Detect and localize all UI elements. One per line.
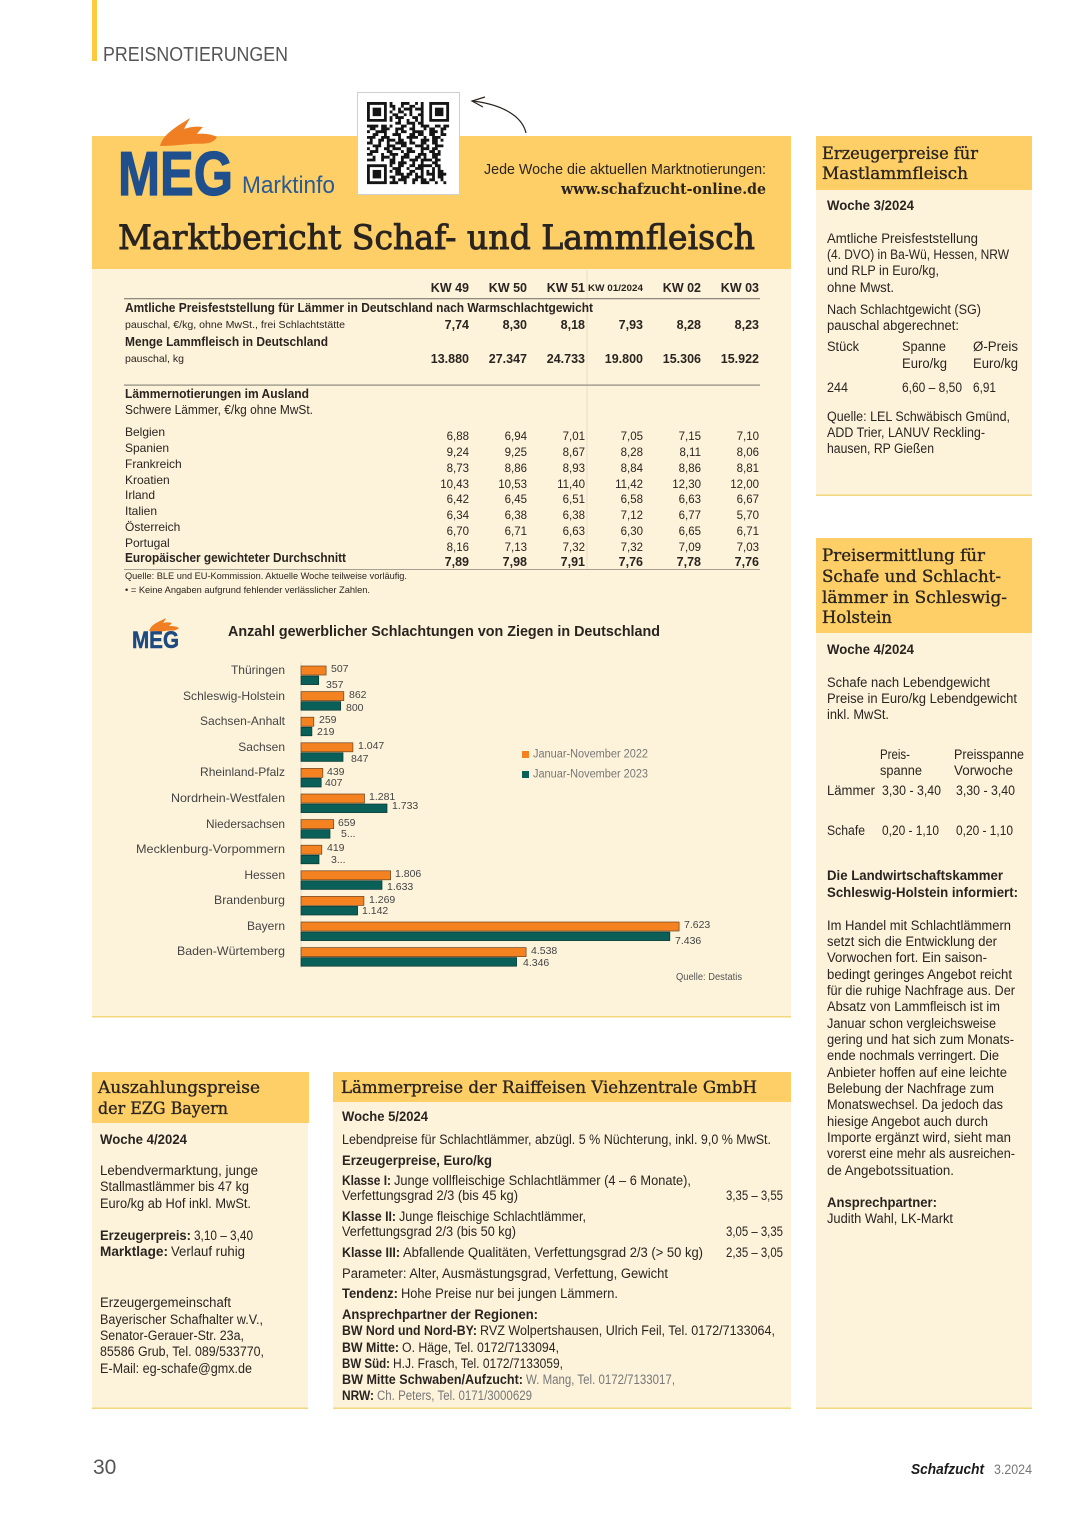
address: Bayerischer Schafhalter w.V., — [100, 1312, 263, 1327]
market commentary: Importe ergänzt wird, sieht man — [827, 1130, 1011, 1145]
row: price determination: Amtliche Preisfeststellung für Lämmer in Deutschland nach Warmschlachtgewicht — [125, 301, 594, 315]
title: Marktbericht Schaf- und Lammfleisch — [118, 218, 755, 258]
row: price determination: pauschal, €/kg, ohne MwSt., frei Schlachtstätte — [125, 319, 345, 331]
icon: small MEG logo: MEG — [132, 627, 179, 654]
price table: 6,91 — [973, 380, 996, 395]
row: price determination: 7,74 — [445, 318, 469, 332]
price classes: Klasse I: — [342, 1173, 391, 1188]
bar value labels: 1.281 — [369, 791, 395, 803]
country rows: 7,09 — [679, 542, 701, 554]
state labels: Nordrhein-Westfalen — [171, 791, 285, 805]
price table: 0,20 - 1,10 — [956, 823, 1013, 838]
state labels: Brandenburg — [214, 893, 285, 907]
country rows — [125, 425, 759, 569]
price table: 3,30 - 3,40 — [956, 783, 1015, 798]
regional contacts: Ch. Peters, Tel. 0171/3000629 — [377, 1388, 532, 1403]
country rows: 7,76 — [619, 555, 643, 569]
bar value labels: 1.633 — [387, 881, 413, 893]
price table: Lämmer — [827, 783, 875, 798]
masthead — [911, 1461, 1032, 1478]
country rows: Spanien — [125, 441, 169, 455]
note: weekly notations: Jede Woche die aktuellen Marktnotierungen: — [484, 162, 766, 178]
masthead: 3.2024 — [994, 1462, 1032, 1477]
chart legend: Januar-November 2022 — [533, 748, 648, 760]
panel text — [100, 1132, 258, 1259]
row: lamb meat quantity: 24.733 — [547, 352, 585, 366]
price classes: 2,35 – 3,05 — [726, 1245, 783, 1260]
price classes: Erzeugerpreise, Euro/kg — [342, 1153, 492, 1168]
intro text: Schafe nach Lebendgewicht — [827, 675, 990, 690]
country rows: 6,94 — [505, 431, 528, 443]
country rows: 7,32 — [621, 542, 643, 554]
country rows: Österreich — [125, 520, 180, 534]
bar value labels: 1.269 — [369, 894, 395, 906]
price table: Vorwoche — [954, 763, 1013, 778]
section heading: PREISNOTIERUNGEN — [103, 44, 288, 66]
regional contacts: BW Mitte Schwaben/Aufzucht: — [342, 1372, 523, 1387]
orange bars 2022 — [301, 666, 679, 957]
panel: Preisermittlung Schleswig-Holstein — [816, 538, 1032, 1409]
icon: small MEG logo — [132, 618, 179, 654]
country rows: Kroatien — [125, 473, 170, 487]
bar value labels: 1.142 — [362, 905, 388, 917]
panel text: Erzeugerpreis: — [100, 1228, 191, 1243]
panel text: Verlauf ruhig — [171, 1244, 245, 1259]
market commentary: hiesige Angebot auch durch — [827, 1114, 988, 1129]
state labels: Sachsen — [238, 740, 285, 754]
country rows: Portugal — [125, 536, 170, 550]
price table: spanne — [880, 763, 922, 778]
country rows: 6,63 — [679, 494, 701, 506]
table: lamb prices — [124, 270, 760, 596]
regional contacts: BW Süd: — [342, 1356, 390, 1371]
row: price determination — [125, 301, 759, 332]
market commentary: Anbieter hoffen auf eine leichte — [827, 1065, 1007, 1080]
country rows: 9,25 — [505, 447, 527, 459]
bar value labels: 1.806 — [395, 868, 421, 880]
bar value labels: 259 — [319, 714, 337, 726]
chart legend — [522, 748, 648, 780]
panel heading: Auszahlungspreise — [97, 1078, 260, 1098]
country rows: 7,15 — [679, 431, 701, 443]
market commentary: Im Handel mit Schlachtlämmern — [827, 918, 1011, 933]
panel heading: der EZG Bayern — [98, 1099, 228, 1119]
source: hausen, RP Gießen — [827, 441, 934, 456]
address: Erzeugergemeinschaft — [100, 1295, 231, 1310]
row: price determination: 7,93 — [619, 318, 643, 332]
country rows: Belgien — [125, 425, 165, 439]
address — [100, 1295, 264, 1376]
row: price determination: 8,30 — [503, 318, 527, 332]
country rows: 8,73 — [447, 463, 469, 475]
price classes: Tendenz: — [342, 1286, 398, 1301]
panel: Auszahlungspreise EZG Bayern — [92, 1072, 309, 1409]
state labels: Baden-Würtemberg — [177, 944, 285, 958]
page number: 30 — [93, 1456, 116, 1479]
price classes: 3,05 – 3,35 — [726, 1224, 783, 1239]
table header: KW 50 — [489, 281, 527, 295]
bar value labels: 4.538 — [531, 945, 557, 957]
bar value labels: 3... — [331, 854, 346, 866]
row: lamb meat quantity: pauschal, kg — [125, 353, 184, 365]
country rows: 6,58 — [621, 494, 643, 506]
panel heading — [816, 136, 1032, 190]
source — [827, 409, 1010, 456]
country rows: 6,34 — [447, 510, 470, 522]
country rows: 8,84 — [621, 463, 644, 475]
country rows: 6,30 — [621, 526, 643, 538]
country rows: Irland — [125, 488, 155, 502]
arrow to QR code — [472, 97, 526, 133]
country rows: 7,03 — [737, 542, 759, 554]
bar value labels: 219 — [317, 726, 335, 738]
chart title: Anzahl gewerblicher Schlachtungen von Ziegen in Deutschland — [228, 623, 660, 640]
country rows: 6,88 — [447, 431, 469, 443]
country rows: 8,06 — [737, 447, 759, 459]
address: Senator-Gerauer-Str. 23a, — [100, 1328, 244, 1343]
market commentary: setzt sich die Entwicklung der — [827, 934, 997, 949]
table header: KW 03 — [721, 281, 759, 295]
country rows: 11,40 — [557, 479, 585, 491]
bar value labels: 357 — [326, 679, 344, 691]
country rows: 7,12 — [621, 510, 643, 522]
country rows: 6,71 — [737, 526, 759, 538]
foreign notations heading — [125, 387, 313, 417]
price table: 0,20 - 1,10 — [882, 823, 939, 838]
table header: KW 49 — [431, 281, 469, 295]
country rows: 10,43 — [440, 479, 469, 491]
panel text: Lebendvermarktung, junge — [100, 1163, 258, 1178]
country rows: 6,67 — [737, 494, 759, 506]
price classes — [342, 1109, 783, 1301]
price table: Euro/kg — [973, 356, 1018, 371]
masthead: Schafzucht — [911, 1461, 985, 1478]
price table — [827, 747, 1024, 838]
country rows: 6,77 — [679, 510, 701, 522]
country rows: 7,76 — [735, 555, 759, 569]
country rows: 6,38 — [563, 510, 585, 522]
contact: Judith Wahl, LK-Markt — [827, 1211, 953, 1226]
country rows: 12,30 — [672, 479, 701, 491]
market commentary: Monatswechsel. Da jedoch das — [827, 1097, 1003, 1112]
bar chart: goat slaughter by state — [136, 662, 710, 969]
country rows: 7,89 — [445, 555, 469, 569]
table header — [124, 281, 760, 299]
row: lamb meat quantity: 15.306 — [663, 352, 701, 366]
market commentary: Schleswig-Holstein informiert: — [827, 885, 1018, 900]
panel text: 3,10 – 3,40 — [194, 1228, 253, 1243]
panel heading: Preisermittlung für — [822, 546, 986, 566]
regional contacts: RVZ Wolpertshausen, Ulrich Feil, Tel. 0172/7133064, — [480, 1323, 775, 1338]
bar value labels: 407 — [325, 777, 343, 789]
market commentary: Die Landwirtschaftskammer — [827, 868, 1004, 883]
country rows: 10,53 — [498, 479, 527, 491]
price classes: Abfallende Qualitäten, Verfettungsgrad 2/3 (> 50 kg) — [403, 1245, 703, 1260]
market commentary: Belebung der Nachfrage zum — [827, 1081, 994, 1096]
panel heading: lämmer in Schleswig- — [822, 588, 1007, 608]
row: price determination: 8,18 — [561, 318, 585, 332]
country rows: 6,65 — [679, 526, 701, 538]
regional contacts: NRW: — [342, 1388, 374, 1403]
country rows: 8,67 — [563, 447, 585, 459]
icon: MEG Marktinfo logo: MEG — [118, 140, 233, 209]
country rows: Europäischer gewichteter Durchschnitt — [125, 551, 347, 565]
row: price determination: 8,28 — [677, 318, 701, 332]
row: lamb meat quantity — [125, 335, 759, 366]
price classes: Parameter: Alter, Ausmästungsgrad, Verfettung, Gewicht — [342, 1266, 668, 1281]
market commentary: Januar schon vergleichsweise — [827, 1016, 996, 1031]
panel text: (4. DVO) in Ba-Wü, Hessen, NRW — [827, 247, 1009, 262]
country rows: 12,00 — [730, 479, 759, 491]
price classes: Woche 5/2024 — [342, 1109, 428, 1124]
country rows: 6,51 — [563, 494, 585, 506]
price table: Preis- — [880, 747, 910, 762]
country rows: 8,11 — [679, 447, 701, 459]
price classes: Lebendpreise für Schlachtlämmer, abzügl. 5 % Nüchterung, inkl. 9,0 % MwSt. — [342, 1132, 771, 1147]
market commentary: vorerst eine mehr als ausreichen- — [827, 1146, 1015, 1161]
bar value labels: 507 — [331, 663, 349, 675]
panel heading — [92, 1072, 309, 1123]
table header: KW 02 — [663, 281, 701, 295]
state labels: Hessen — [244, 868, 285, 882]
market commentary: für die ruhige Nachfrage aus. Der — [827, 983, 1015, 998]
contact — [827, 1195, 953, 1226]
panel heading: Holstein — [822, 608, 892, 628]
panel heading: Schafe und Schlacht- — [822, 567, 1001, 587]
intro text: inkl. MwSt. — [827, 707, 889, 722]
market commentary: Absatz von Lammfleisch ist im — [827, 999, 1000, 1014]
panel text: und RLP in Euro/kg, — [827, 263, 939, 278]
country rows: 5,70 — [737, 510, 759, 522]
country rows: 8,86 — [679, 463, 701, 475]
bar value labels — [317, 663, 710, 969]
state labels: Schleswig-Holstein — [183, 689, 285, 703]
bar value labels: 800 — [346, 702, 364, 714]
note: weekly notations: www.schafzucht-online.de — [560, 181, 766, 198]
country rows: 7,91 — [561, 555, 585, 569]
panel text: Nach Schlachtgewicht (SG) — [827, 302, 981, 317]
country rows: 6,63 — [563, 526, 585, 538]
panel heading: Mastlammfleisch — [822, 164, 968, 184]
bar value labels: 7.623 — [684, 919, 710, 931]
country rows: 8,86 — [505, 463, 527, 475]
panel heading — [333, 1072, 791, 1102]
regional contacts: H.J. Frasch, Tel. 0172/7133059, — [393, 1356, 563, 1371]
source: ADD Trier, LANUV Reckling- — [827, 425, 985, 440]
regional contacts: O. Häge, Tel. 0172/7133094, — [402, 1340, 559, 1355]
row: lamb meat quantity: 13.880 — [431, 352, 469, 366]
price table: Stück — [827, 339, 859, 354]
price classes: Junge fleischige Schlachtlämmer, — [399, 1209, 586, 1224]
market commentary — [827, 868, 1018, 1178]
row: lamb meat quantity: 27.347 — [489, 352, 527, 366]
price table: Ø-Preis — [973, 339, 1018, 354]
country rows: 9,24 — [447, 447, 470, 459]
state labels: Niedersachsen — [206, 817, 285, 831]
panel text: Euro/kg ab Hof inkl. MwSt. — [100, 1196, 251, 1211]
state labels: Sachsen-Anhalt — [200, 714, 286, 728]
country rows: Italien — [125, 504, 157, 518]
country rows: 6,42 — [447, 494, 469, 506]
country rows: 7,13 — [505, 542, 527, 554]
panel heading: Erzeugerpreise für — [822, 144, 979, 164]
country rows: 7,05 — [621, 431, 643, 443]
country rows: 8,16 — [447, 542, 469, 554]
bar value labels: 5... — [341, 828, 356, 840]
price classes: Verfettungsgrad 2/3 (bis 50 kg) — [342, 1224, 516, 1239]
panel heading: Lämmerpreise der Raiffeisen Viehzentrale GmbH — [341, 1078, 757, 1098]
section heading — [92, 0, 288, 66]
table header: KW 51 — [547, 281, 585, 295]
market commentary: gering und hat sich zum Monats- — [827, 1032, 1014, 1047]
header band — [92, 118, 791, 269]
regional contacts: W. Mang, Tel. 0172/7133017, — [526, 1372, 675, 1387]
panel text: Amtliche Preisfeststellung — [827, 231, 978, 246]
table header: KW 01/2024 — [588, 283, 643, 293]
chart source: Quelle: Destatis — [676, 972, 742, 983]
table source note: Quelle: BLE und EU-Kommission. Aktuelle Woche teilweise vorläufig. — [125, 571, 407, 582]
country rows: 6,70 — [447, 526, 469, 538]
panel text — [827, 198, 1009, 333]
bar value labels: 1.047 — [358, 740, 384, 752]
bar value labels: 4.346 — [523, 957, 549, 969]
price classes: Klasse II: — [342, 1209, 396, 1224]
table source note — [125, 571, 407, 596]
country rows: 7,78 — [677, 555, 701, 569]
row: lamb meat quantity: Menge Lammfleisch in Deutschland — [125, 335, 328, 349]
price classes: Junge vollfleischige Schlachtlämmer (4 – 6 Monate), — [394, 1173, 691, 1188]
country rows: 7,10 — [737, 431, 759, 443]
country rows: 8,93 — [563, 463, 585, 475]
address: 85586 Grub, Tel. 089/533770, — [100, 1344, 264, 1359]
regional contacts: BW Nord und Nord-BY: — [342, 1323, 477, 1338]
panel: Erzeugerpreise für Mastlammfleisch — [816, 136, 1032, 496]
market commentary: de Angebotssituation. — [827, 1163, 954, 1178]
panel text: Woche 3/2024 — [827, 198, 914, 213]
country rows: 6,45 — [505, 494, 527, 506]
market commentary: Vorwochen fort. Ein saison- — [827, 950, 987, 965]
panel text: pauschal abgerechnet: — [827, 318, 959, 333]
price classes: Hohe Preise nur bei jungen Lämmern. — [401, 1286, 618, 1301]
source: Quelle: LEL Schwäbisch Gmünd, — [827, 409, 1010, 424]
country rows: 8,81 — [737, 463, 759, 475]
bar value labels: 7.436 — [675, 935, 701, 947]
row: price determination: 8,23 — [735, 318, 759, 332]
price table: 244 — [827, 380, 848, 395]
country rows: 7,01 — [563, 431, 585, 443]
green bars 2023 — [301, 676, 670, 966]
row: lamb meat quantity: 15.922 — [721, 352, 759, 366]
state labels: Mecklenburg-Vorpommern — [136, 842, 285, 856]
price table: Preisspanne — [954, 747, 1024, 762]
price table: 3,30 - 3,40 — [882, 783, 941, 798]
country rows: 11,42 — [615, 479, 643, 491]
price table: Euro/kg — [902, 356, 947, 371]
panel: Lämmerpreise Raiffeisen — [333, 1072, 791, 1409]
icon: MEG Marktinfo logo — [118, 118, 335, 209]
regional contacts: Ansprechpartner der Regionen: — [342, 1307, 538, 1322]
bar value labels: 659 — [338, 817, 356, 829]
country rows: 7,98 — [503, 555, 527, 569]
bar value labels: 862 — [349, 689, 367, 701]
icon: QR code — [358, 92, 460, 194]
country rows: 7,32 — [563, 542, 585, 554]
state labels: Bayern — [247, 919, 285, 933]
note: weekly notations — [484, 162, 766, 198]
price table: Schafe — [827, 823, 865, 838]
state labels: Rheinland-Pfalz — [200, 765, 285, 779]
price classes: Verfettungsgrad 2/3 (bis 45 kg) — [342, 1188, 518, 1203]
row: lamb meat quantity: 19.800 — [605, 352, 643, 366]
address: E-Mail: eg-schafe@gmx.de — [100, 1361, 252, 1376]
intro text: Woche 4/2024 — [827, 642, 914, 657]
country rows: 6,71 — [505, 526, 527, 538]
market commentary: bedingt geringes Angebot reicht — [827, 967, 1012, 982]
country rows: 8,28 — [621, 447, 643, 459]
bar value labels: 419 — [327, 842, 345, 854]
foreign notations heading: Schwere Lämmer, €/kg ohne MwSt. — [125, 403, 313, 417]
country rows: 6,38 — [505, 510, 527, 522]
icon: MEG Marktinfo logo: Marktinfo — [242, 172, 335, 199]
intro text — [827, 642, 1017, 722]
price classes: 3,35 – 3,55 — [726, 1188, 783, 1203]
price table: Spanne — [902, 339, 946, 354]
chart legend: Januar-November 2023 — [533, 768, 648, 780]
intro text: Preise in Euro/kg Lebendgewicht — [827, 691, 1017, 706]
price classes: Klasse III: — [342, 1245, 400, 1260]
panel text: ohne Mwst. — [827, 280, 894, 295]
foreign notations heading: Lämmernotierungen im Ausland — [125, 387, 309, 401]
price table: 6,60 – 8,50 — [902, 380, 962, 395]
panel heading — [816, 538, 1032, 633]
market commentary: ende nochmals verringert. Die — [827, 1048, 999, 1063]
panel: Marktbericht — [92, 92, 791, 1018]
regional contacts: BW Mitte: — [342, 1340, 399, 1355]
price table — [827, 339, 1018, 395]
bar value labels: 847 — [351, 753, 369, 765]
state labels: Thüringen — [231, 663, 285, 677]
contact: Ansprechpartner: — [827, 1195, 937, 1210]
regional contacts — [342, 1307, 775, 1403]
panel text: Woche 4/2024 — [100, 1132, 187, 1147]
bar value labels: 1.733 — [392, 800, 418, 812]
panel text: Stallmastlämmer bis 47 kg — [100, 1179, 249, 1194]
state labels — [136, 663, 286, 958]
bar value labels: 439 — [327, 766, 345, 778]
table source note: • = Keine Angaben aufgrund fehlender verlässlicher Zahlen. — [125, 585, 370, 596]
country rows: Frankreich — [125, 457, 182, 471]
panel text: Marktlage: — [100, 1244, 168, 1259]
